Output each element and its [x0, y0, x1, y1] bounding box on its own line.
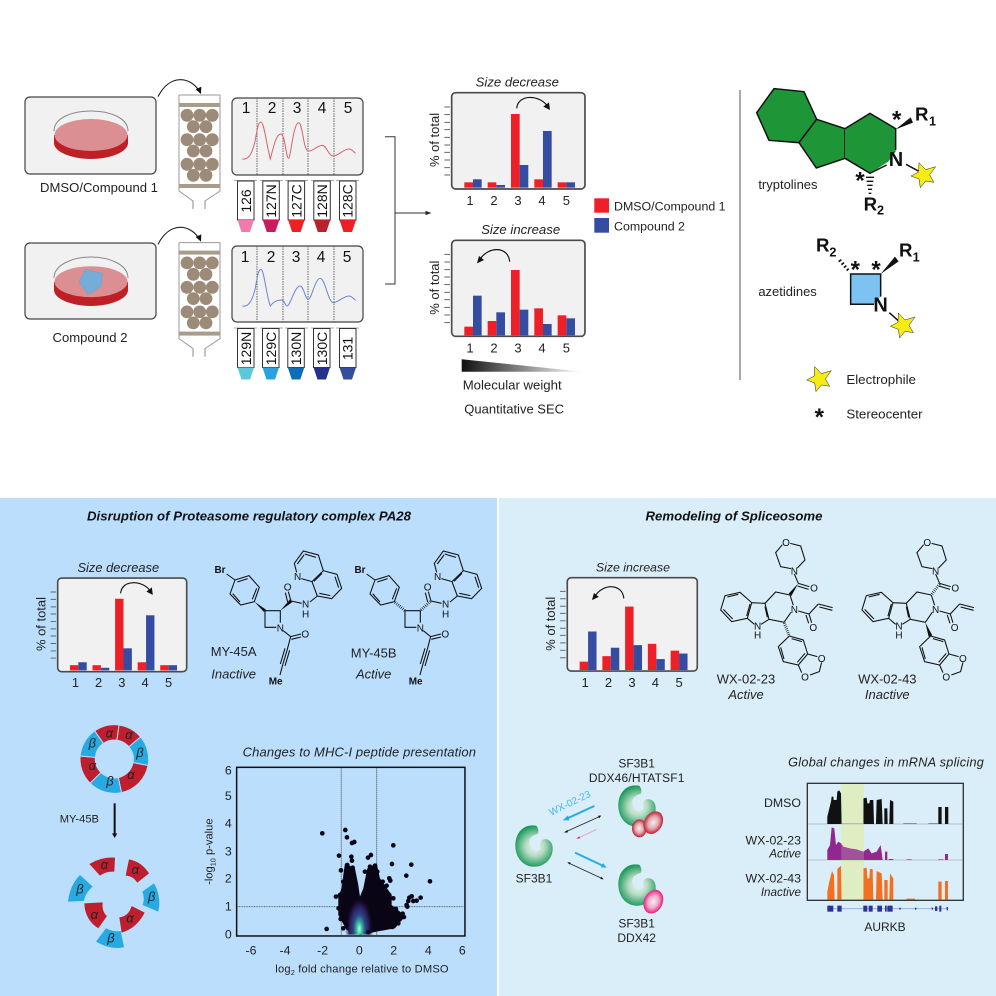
TMT tubes row 1: 128N	[314, 184, 330, 218]
bar chart: size increase: 3	[514, 341, 522, 356]
volcano plot: MHC-I peptide presentation: 1	[225, 899, 232, 913]
divider line	[739, 90, 741, 380]
chemical structure: WX-02-43: O	[951, 623, 959, 634]
chemotype: tryptolines: 1	[929, 114, 936, 128]
bar chart: size increase: 4	[538, 341, 546, 356]
legend: electrophile and stereocenter	[807, 367, 923, 431]
chemical structure: WX-02-43: N	[932, 566, 939, 577]
bar chart: size decrease: % of total	[427, 113, 442, 167]
bar chart: spliceosome size increase: 1	[582, 675, 589, 690]
PA28 disrupted ring: β	[147, 889, 156, 904]
legend: electrophile and stereocenter: *	[815, 404, 825, 431]
chemical structure: MY-45B: N	[442, 600, 449, 611]
bar chart: PA28 size decrease: % of total	[33, 597, 48, 651]
molecular weight wedge	[462, 359, 583, 416]
chemical structure: WX-02-23: O	[801, 672, 809, 683]
bar chart: spliceosome size increase: 2	[605, 675, 612, 690]
chromatogram 2: 1	[241, 249, 249, 266]
bar chart: PA28 size decrease: 5	[165, 675, 172, 690]
chromatogram 1	[232, 98, 363, 175]
PA28 disrupted ring: β	[75, 881, 84, 896]
chemical structure: WX-02-23: O	[810, 583, 818, 594]
chemical structure: WX-02-43: Inactive	[865, 687, 910, 702]
arrow: dish 2 to column	[158, 227, 201, 244]
chromatogram 1: 3	[293, 100, 301, 117]
molecular weight wedge: Molecular weight	[463, 377, 562, 392]
volcano plot: MHC-I peptide presentation: 6	[225, 763, 232, 777]
PA28 disrupted ring: β	[106, 931, 115, 946]
chemical structure: WX-02-23: N	[791, 566, 798, 577]
bar chart: PA28 size decrease: 4	[141, 675, 149, 690]
volcano plot: MHC-I peptide presentation: -log	[204, 866, 216, 885]
chromatogram 2: 2	[267, 249, 275, 266]
genome tracks: AURKB splicing: WX-02-43	[745, 871, 801, 885]
bar chart: size decrease: 2	[490, 193, 498, 208]
bar chart: PA28 size decrease: 2	[95, 675, 102, 690]
PA28 intact ring: α	[127, 767, 135, 782]
volcano plot: MHC-I peptide presentation: 2	[225, 872, 232, 886]
chemotype: tryptolines: *	[892, 106, 902, 133]
chemical structure: MY-45A: O	[284, 583, 292, 594]
chemical structure: WX-02-43: O	[923, 538, 931, 549]
chemotype: tryptolines: R	[915, 104, 929, 125]
volcano plot: MHC-I peptide presentation	[204, 745, 476, 977]
bar chart: spliceosome size increase: 3	[628, 675, 636, 690]
chemotype: tryptolines: *	[855, 167, 865, 194]
TMT tubes row 2: 129N	[238, 332, 254, 365]
PA28 disrupted ring: α	[126, 910, 134, 925]
heading: proteasome panel: Disruption of Proteasome regulatory complex PA28	[87, 509, 412, 524]
chemical structure: WX-02-43: O	[942, 672, 950, 683]
volcano plot: MHC-I peptide presentation: fold change relative to DMSO	[295, 963, 449, 975]
bar chart: spliceosome size increase: % of total	[543, 597, 558, 651]
chemotype: azetidines: 1	[913, 250, 920, 264]
bar chart: size decrease	[427, 75, 585, 208]
protein: SF3B1 free: SF3B1	[516, 871, 553, 885]
chemical structure: MY-45B: Br	[354, 565, 366, 576]
legend: treatment colours: Compound 2	[614, 219, 685, 233]
chemical structure: WX-02-23	[717, 538, 833, 702]
workflow: cell dish DMSO/Compound 1: DMSO/Compound 1	[40, 180, 158, 195]
bar chart: size decrease: 5	[563, 193, 570, 208]
chemical structure: WX-02-23: Active	[727, 687, 764, 702]
TMT tubes row 1: 126	[238, 189, 254, 213]
genome tracks: AURKB splicing: Active	[768, 847, 802, 860]
genome tracks: AURKB splicing: DMSO	[764, 796, 801, 810]
TMT tubes row 2: 130N	[288, 332, 304, 365]
volcano plot: MHC-I peptide presentation: 5	[225, 789, 232, 803]
TMT tubes row 2: 129C	[263, 332, 279, 365]
PA28 disrupted ring	[68, 857, 159, 948]
chemical structure: MY-45B: Me	[409, 676, 423, 687]
TMT tubes row 2	[234, 328, 359, 380]
protein complex: SF3B1 DDX42: DDX42	[617, 931, 656, 945]
chemical structure: MY-45B: N	[417, 623, 424, 634]
chromatogram 2: 5	[343, 249, 351, 266]
PA28 disrupted ring: α	[132, 862, 140, 877]
bar chart: size decrease: 1	[466, 193, 474, 208]
bar chart: PA28 size decrease: Size decrease	[77, 560, 159, 575]
legend: electrophile and stereocenter: Electrophile	[846, 372, 916, 387]
molecular weight wedge: Quantitative SEC	[464, 401, 564, 416]
chemical structure: MY-45B: MY-45B	[351, 646, 397, 661]
chromatogram 1: 1	[242, 100, 250, 117]
panel: spliceosome background	[499, 498, 996, 996]
chemical structure: MY-45A: N	[294, 572, 301, 583]
protein complex: SF3B1 DDX46/HTATSF1: SF3B1	[618, 756, 655, 770]
bar chart: size decrease: 3	[514, 193, 522, 208]
bar chart: spliceosome size increase: 5	[675, 675, 683, 690]
chemical structure: MY-45B: Active	[355, 666, 391, 681]
bar chart: size decrease: 4	[538, 193, 546, 208]
chemical structure: WX-02-43: H	[895, 631, 903, 642]
bracket and arrow	[385, 137, 430, 284]
chromatogram 2	[232, 246, 363, 322]
PA28 intact ring: β	[135, 745, 144, 760]
bar chart: size increase: 5	[563, 341, 570, 356]
volcano plot: MHC-I peptide presentation: 2	[390, 943, 397, 957]
chemical structure: MY-45B	[351, 551, 482, 687]
chemotype: tryptolines: tryptolines	[758, 177, 818, 192]
legend: electrophile and stereocenter: Stereocenter	[846, 407, 923, 422]
bar chart: spliceosome size increase: 4	[652, 675, 659, 690]
chemotype: azetidines: azetidines	[758, 284, 817, 299]
genome tracks: AURKB splicing: Global changes in mRNA splicing	[788, 756, 984, 770]
protein complex: SF3B1 DDX46/HTATSF1	[589, 756, 685, 838]
heading: spliceosome panel: Remodeling of Spliceosome	[646, 509, 822, 524]
volcano plot: MHC-I peptide presentation: -4	[279, 943, 291, 957]
chemical structure: MY-45A	[211, 551, 342, 687]
TMT tubes row 1: 127N	[263, 184, 279, 218]
bar chart: PA28 size decrease	[33, 560, 187, 690]
chemical structure: MY-45B: N	[434, 572, 441, 583]
volcano plot: MHC-I peptide presentation: 6	[459, 943, 466, 957]
chemical structure: WX-02-23: N	[791, 605, 798, 616]
TMT tubes row 2: 131	[340, 337, 356, 360]
chemical structure: WX-02-23: WX-02-23	[717, 671, 775, 686]
protein complex: SF3B1 DDX46/HTATSF1: DDX46/HTATSF1	[589, 771, 685, 785]
panel: proteasome background	[0, 498, 497, 996]
chemical structure: WX-02-23: N	[754, 621, 761, 632]
chemotype: azetidines: *	[851, 256, 861, 283]
workflow: cell dish Compound 2	[25, 243, 156, 345]
genome tracks: AURKB splicing: AURKB	[864, 920, 906, 934]
chemotype: tryptolines: 2	[877, 204, 884, 218]
PA28 intact ring: β	[105, 773, 114, 788]
volcano plot: MHC-I peptide presentation: -6	[245, 943, 257, 957]
chemotype: azetidines	[758, 235, 920, 338]
bar chart: spliceosome size increase: Size increase	[596, 561, 670, 575]
genome tracks: AURKB splicing: Inactive	[761, 886, 802, 899]
chemical structure: WX-02-43: O	[959, 654, 967, 665]
bar chart: size increase: % of total	[427, 260, 442, 315]
PA28 intact ring	[80, 725, 149, 793]
chemical structure: WX-02-23: O	[809, 623, 817, 634]
chemotype: tryptolines: N	[889, 149, 903, 171]
chemical structure: MY-45B: H	[442, 610, 449, 621]
chemotype: tryptolines	[757, 89, 936, 218]
equilibrium arrows	[548, 789, 607, 879]
chemical structure: WX-02-23: O	[818, 654, 826, 665]
PA28 disrupted ring: α	[101, 857, 109, 872]
protein complex: SF3B1 DDX42	[617, 864, 667, 945]
bar chart: size decrease: Size decrease	[476, 75, 559, 90]
bar chart: size increase	[427, 222, 585, 356]
chemical structure: MY-45A: N	[277, 623, 284, 634]
volcano plot: MHC-I peptide presentation: 0	[356, 943, 363, 957]
chemotype: azetidines: R	[816, 235, 830, 256]
column 1	[179, 95, 220, 211]
chemical structure: WX-02-43: O	[951, 583, 959, 594]
volcano plot: MHC-I peptide presentation: 0	[225, 928, 232, 942]
arrow: MY-45B treatment: MY-45B	[60, 813, 99, 825]
chemical structure: WX-02-23: O	[782, 538, 790, 549]
chromatogram 2: 4	[317, 249, 326, 266]
PA28 intact ring: α	[89, 758, 97, 773]
chemotype: azetidines: N	[873, 295, 888, 317]
bar chart: PA28 size decrease: 1	[72, 675, 79, 690]
TMT tubes row 1	[234, 180, 359, 232]
bar chart: size increase: Size increase	[481, 222, 560, 237]
chemotype: azetidines: *	[871, 256, 881, 283]
volcano plot: MHC-I peptide presentation: -2	[317, 943, 328, 957]
volcano plot: MHC-I peptide presentation: log	[275, 963, 291, 975]
legend: treatment colours	[594, 198, 726, 233]
legend: treatment colours: DMSO/Compound 1	[614, 200, 726, 214]
volcano plot: MHC-I peptide presentation: 2	[291, 968, 295, 977]
chemical structure: WX-02-43: N	[932, 605, 939, 616]
genome tracks: AURKB splicing	[745, 756, 984, 934]
protein complex: SF3B1 DDX42: SF3B1	[618, 916, 655, 930]
PA28 intact ring: α	[125, 727, 133, 742]
protein: SF3B1 free	[515, 825, 553, 885]
bar chart: size increase: 1	[466, 341, 474, 356]
chemical structure: MY-45B: O	[424, 583, 432, 594]
column 2	[179, 243, 220, 359]
chemical structure: MY-45B: O	[441, 629, 449, 640]
chromatogram 2: 3	[292, 249, 300, 266]
chromatogram 1: 2	[268, 100, 276, 117]
TMT tubes row 1: 127C	[288, 184, 304, 218]
chemical structure: WX-02-43: WX-02-43	[858, 671, 917, 686]
volcano plot: MHC-I peptide presentation: p-value	[204, 818, 216, 858]
PA28 disrupted ring: α	[91, 907, 99, 922]
genome tracks: AURKB splicing: WX-02-23	[745, 833, 801, 847]
chromatogram 1: 5	[344, 100, 352, 117]
chemotype: azetidines: R	[899, 240, 913, 261]
chemical structure: MY-45A: Br	[214, 565, 226, 576]
chemical structure: MY-45A: Me	[269, 676, 283, 687]
PA28 intact ring: β	[88, 736, 97, 751]
chromatogram 1: 4	[318, 100, 327, 117]
chemical structure: MY-45A: MY-45A	[211, 644, 257, 659]
arrow: MY-45B treatment	[60, 803, 117, 838]
bar chart: size increase: 2	[490, 341, 498, 356]
volcano plot: MHC-I peptide presentation: 4	[225, 817, 232, 831]
chemotype: tryptolines: R	[864, 194, 878, 215]
chemical structure: MY-45A: Inactive	[211, 666, 256, 681]
volcano plot: MHC-I peptide presentation: 10	[208, 858, 217, 866]
chemical structure: MY-45A: N	[302, 600, 309, 611]
chemical structure: MY-45A: H	[302, 610, 309, 621]
workflow: cell dish Compound 2: Compound 2	[53, 330, 127, 345]
bar chart: spliceosome size increase	[543, 561, 697, 690]
chemical structure: WX-02-43: N	[895, 621, 903, 632]
chemotype: azetidines: 2	[829, 245, 836, 259]
bar chart: PA28 size decrease: 3	[118, 675, 125, 690]
chemical structure: WX-02-23: H	[754, 631, 761, 642]
volcano plot: MHC-I peptide presentation: 3	[225, 844, 232, 858]
TMT tubes row 2: 130C	[314, 332, 330, 365]
workflow: cell dish DMSO/Compound 1	[25, 97, 158, 195]
equilibrium arrows: WX-02-23	[548, 789, 593, 819]
chemical structure: WX-02-43	[858, 538, 974, 702]
arrow: dish 1 to column	[158, 80, 201, 97]
volcano plot: MHC-I peptide presentation: 4	[425, 943, 432, 957]
volcano plot: MHC-I peptide presentation: Changes to MHC-I peptide presentation	[243, 745, 476, 760]
PA28 intact ring: α	[106, 725, 114, 740]
chemical structure: MY-45A: O	[301, 629, 309, 640]
TMT tubes row 1: 128C	[340, 184, 356, 218]
